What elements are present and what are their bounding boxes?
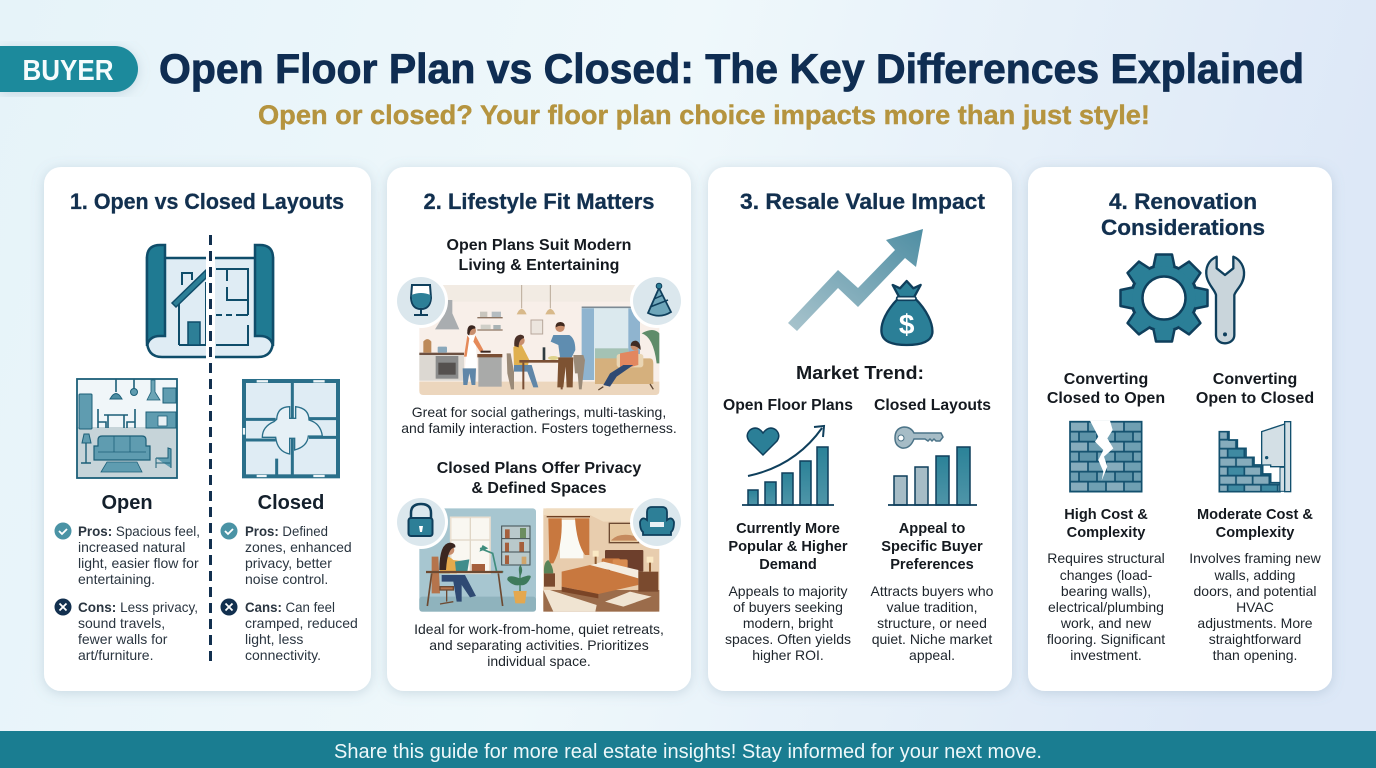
icon: open room (77, 379, 177, 478)
text: open demand heading: Currently More (736, 521, 840, 537)
text block: closed pros: privacy, better (245, 555, 332, 571)
caption: closed plans: and separating activities. Prioritizes (429, 637, 649, 653)
subheading: closed plans: & Defined Spaces (471, 480, 607, 497)
label: moderate cost: Complexity (1216, 525, 1295, 541)
chart: open plan rising bars (742, 426, 834, 505)
text: closed market description: quiet. Niche market (872, 631, 992, 647)
subheading: open plans: Living & Entertaining (459, 257, 619, 274)
icon: padlock (394, 495, 448, 549)
panel: open vs closed layouts (44, 167, 371, 691)
label: open to closed (1196, 371, 1314, 407)
text: closed to open description: electrical/plumbing (1048, 599, 1164, 615)
footer banner: Share this guide for more real estate insights! Stay informed for your next move. (334, 741, 1042, 763)
text block: closed cons: connectivity. (245, 647, 321, 663)
text block: open pros: Pros: Spacious feel, (78, 523, 200, 539)
text block: open cons: fewer walls for (78, 631, 168, 647)
text: closed preferences heading (881, 521, 983, 573)
caption: open plans: Great for social gatherings, multi-tasking, (412, 404, 666, 420)
text: open demand heading: Demand (759, 557, 817, 573)
subheading: closed plans (437, 460, 641, 497)
text: open market description: of buyers seeking (733, 599, 843, 615)
icon: armchair (630, 495, 684, 549)
label: closed to open: Converting (1064, 371, 1148, 388)
badge: BUYER: BUYER (22, 55, 114, 87)
text: closed to open description (1047, 550, 1165, 663)
chart: closed layout bars and key (888, 427, 977, 505)
text block: closed pros (220, 522, 352, 587)
text: open market description: spaces. Often yields (725, 631, 851, 647)
icon: blueprint (147, 240, 273, 362)
text: open to closed description: HVAC (1236, 599, 1274, 615)
text: closed to open description: flooring. Significant (1047, 631, 1165, 647)
panel: renovation (1028, 167, 1332, 691)
text: closed to open description: investment. (1070, 647, 1142, 663)
text block: closed cons: Cans: Can feel (245, 599, 335, 615)
label: Closed: Closed (258, 492, 324, 514)
text block: open cons (54, 598, 198, 663)
text: closed preferences heading: Appeal to (899, 521, 965, 537)
heading: panel 1: 1. Open vs Closed Layouts (70, 189, 344, 214)
icon: new wall and door (1219, 422, 1291, 492)
badge: BUYER (0, 46, 138, 92)
text block: open pros: entertaining. (78, 571, 155, 587)
caption: open plans (401, 404, 677, 436)
label: Open: Open (101, 492, 153, 514)
heading: panel 4 (1101, 189, 1265, 240)
heading: panel 3: 3. Resale Value Impact (740, 189, 986, 214)
text: open market description: Appeals to majority (728, 583, 848, 599)
text: open demand heading: Popular & Higher (728, 539, 848, 555)
text: closed preferences heading: Preferences (890, 557, 974, 573)
icon: closed plan (244, 381, 338, 477)
icon: money bag: $ (899, 309, 915, 340)
text: closed to open description: work, and new (1060, 615, 1152, 631)
icon: rising arrow (788, 229, 923, 331)
title: Open Floor Plan vs Closed: The Key Differences Explained (159, 45, 1304, 92)
subheading: open plans (447, 237, 631, 274)
text: open demand heading (728, 521, 848, 573)
label: high cost: Complexity (1067, 525, 1146, 541)
text: closed preferences heading: Specific Buyer (881, 539, 983, 555)
icon: money bag (881, 281, 932, 345)
label: high cost: High Cost & (1064, 507, 1148, 523)
text: closed to open description: changes (load- (1060, 567, 1153, 583)
label: open floor plans: Open Floor Plans (723, 397, 853, 414)
text: open to closed description: straightforward (1209, 631, 1301, 647)
subheading: open plans: Open Plans Suit Modern (447, 237, 631, 254)
text: open market description: modern, bright (743, 615, 833, 631)
text: open to closed description: adjustments. More (1197, 615, 1313, 631)
label: moderate cost (1197, 507, 1313, 541)
text block: open pros (54, 522, 200, 587)
heading: panel 2: 2. Lifestyle Fit Matters (424, 189, 654, 214)
caption: closed plans: Ideal for work-from-home, quiet retreats, (414, 621, 664, 637)
text: open to closed description: Involves framing new (1189, 550, 1322, 566)
text block: open pros: increased natural (78, 539, 185, 555)
text block: closed pros: zones, enhanced (245, 539, 352, 555)
heading: panel 4: Considerations (1101, 215, 1265, 240)
caption: open plans: and family interaction. Fosters togetherness. (401, 420, 677, 436)
panel: lifestyle fit (387, 167, 691, 691)
text: closed market description: value tradition, (886, 599, 978, 615)
label: closed layouts: Closed Layouts (874, 397, 991, 414)
text block: closed cons: cramped, reduced (245, 615, 358, 631)
text: closed to open description: Requires structural (1047, 550, 1165, 566)
illustration: home office (419, 508, 659, 612)
label: closed to open: Closed to Open (1047, 390, 1165, 407)
icon: cracked wall (1070, 421, 1142, 492)
text: open to closed description: than opening. (1213, 647, 1297, 663)
label: high cost (1064, 507, 1148, 541)
subheading: closed plans: Closed Plans Offer Privacy (437, 460, 641, 477)
text block: open cons: Cons: Less privacy, (78, 599, 198, 615)
label: open to closed: Open to Closed (1196, 390, 1314, 407)
text: open market description (725, 583, 851, 663)
icon: gear (1120, 254, 1208, 342)
text: open to closed description: walls, adding (1214, 567, 1295, 583)
text: closed to open description: bearing walls), (1061, 583, 1151, 599)
icon: party hat (630, 274, 684, 328)
text: open to closed description (1189, 550, 1322, 663)
text block: open pros: light, easier flow for (78, 555, 199, 571)
footer banner (0, 731, 1376, 768)
text block: open cons: art/furniture. (78, 647, 153, 663)
text block: closed pros: Pros: Defined (245, 523, 328, 539)
subtitle: Open or closed? Your floor plan choice impacts more than just style! (258, 100, 1150, 130)
label: closed to open (1047, 371, 1165, 407)
icon: wrench (1206, 257, 1244, 343)
heading: panel 4: 4. Renovation (1109, 189, 1257, 214)
icon: wine glass (394, 274, 448, 328)
text block: closed pros: noise control. (245, 571, 328, 587)
text: closed market description: structure, or need (877, 615, 987, 631)
label: moderate cost: Moderate Cost & (1197, 507, 1313, 523)
text: closed market description (871, 583, 994, 663)
text: closed market description: Attracts buyers who (871, 583, 994, 599)
text block: closed cons: light, less (245, 631, 303, 647)
illustration: open plan social scene (419, 285, 659, 395)
text block: open cons: sound travels, (78, 615, 165, 631)
subheading: market trend: Market Trend: (796, 362, 924, 383)
text: closed market description: appeal. (909, 647, 955, 663)
panel: resale value (708, 167, 1012, 691)
caption: closed plans: individual space. (487, 653, 591, 669)
text: open market description: higher ROI. (752, 647, 824, 663)
divider line (209, 235, 212, 665)
text: open to closed description: doors, and potential (1194, 583, 1316, 599)
label: open to closed: Converting (1213, 371, 1297, 388)
text block: closed cons (220, 598, 358, 663)
caption: closed plans (414, 621, 664, 669)
